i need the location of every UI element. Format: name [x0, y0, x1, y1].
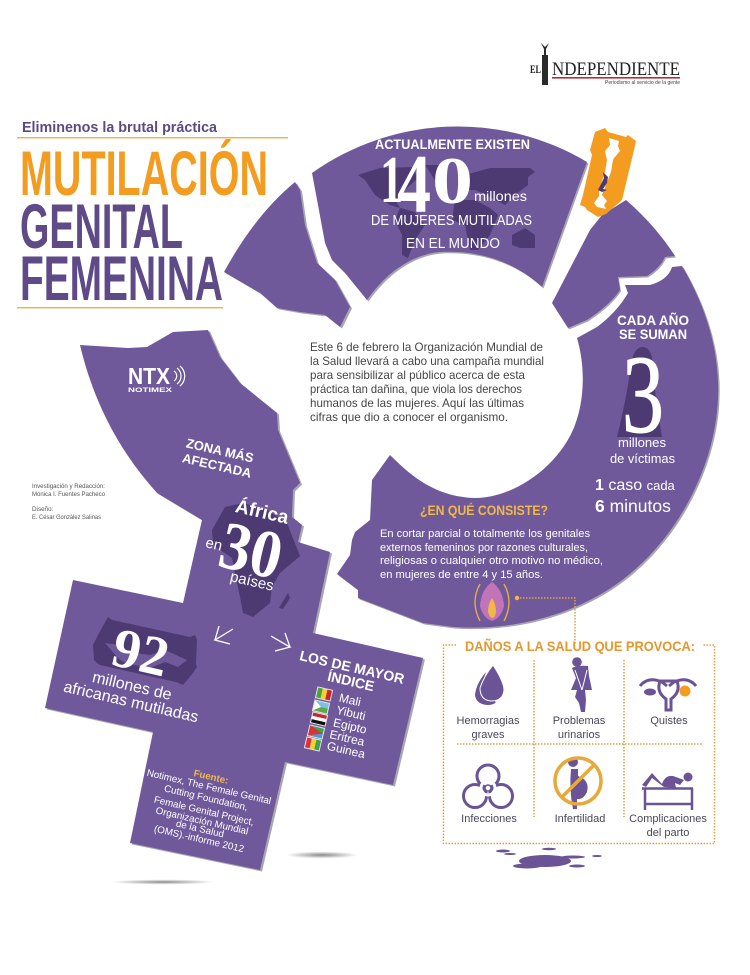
text: los de mayor índice: ÍNDICE [326, 668, 376, 694]
label: problemas urinarios: Problemas [553, 715, 606, 727]
text: cada año se suman [617, 311, 689, 342]
text: millones de víctimas: de víctimas [610, 451, 675, 466]
icon: anatomy [475, 582, 509, 621]
map: Africa [212, 503, 300, 617]
text: fuente [146, 768, 272, 855]
text: actualmente existen: ACTUALMENTE EXISTEN [375, 136, 530, 152]
heading: en qué consiste: ¿EN QUÉ CONSISTE? [420, 503, 548, 518]
list: countries with flags [304, 686, 368, 761]
logo: El Independiente: NDEPENDIENTE [552, 59, 680, 80]
panel: daños a la salud: urinarios [558, 729, 601, 741]
icon: no pregnancy [555, 757, 601, 809]
label: quistes: Quistes [650, 715, 688, 727]
text: fuente: Cutting Foundation, [163, 784, 249, 813]
text: country names: Yibuti [335, 703, 367, 723]
text: cada año se suman: CADA AÑO [617, 311, 689, 328]
text: fuente: (OMS).-informe 2012 [153, 824, 245, 855]
logo: El Independiente: Periodismo al servicio de la gente [605, 80, 680, 86]
text: credits: Diseño: [32, 506, 54, 513]
label: infecciones: Infecciones [461, 813, 517, 825]
text: country names: Mali [338, 691, 362, 709]
flag: Mali [315, 686, 333, 702]
text: credits: Mónica I. Fuentes Pacheco [32, 491, 105, 498]
text: millones: millones [474, 188, 527, 204]
text: country names: Guinea [326, 739, 367, 761]
panel: cross with Africa data [45, 330, 425, 872]
world map [358, 165, 535, 258]
label: infertilidad: Infertilidad [555, 813, 605, 825]
text: fuente: de la Salud [175, 819, 225, 840]
number: 30: 30 [212, 506, 290, 594]
text: zona más afectada: AFECTADA [181, 450, 254, 481]
text: credits: Investigación y Redacción: [32, 483, 105, 490]
text: 1 caso cada 6 minutos: 6 minutos [595, 496, 671, 516]
title [20, 139, 268, 314]
text: credits [32, 483, 105, 521]
text: fuente: Fuente: [192, 768, 229, 787]
panel: intro text: cifras que dio a conocer el organismo. [310, 410, 508, 424]
title: MUTILACIÓN [20, 139, 268, 209]
logo: El Independiente [530, 43, 680, 86]
panel: intro text: humanos de las mujeres. Aquí las últimas [310, 396, 524, 410]
logo: Notimex [128, 363, 185, 394]
logo: El Independiente: EL [530, 62, 541, 76]
arrow: to 92 millones [215, 626, 233, 644]
icon: purple stain [496, 848, 602, 868]
arrow: to mayor índice [271, 633, 290, 651]
title: GENITAL [20, 192, 183, 262]
icon: uterus [640, 680, 696, 710]
text: definición: En cortar parcial o totalmente los genitales [380, 528, 591, 540]
panel: daños a la salud: del parto [647, 827, 689, 839]
flag: Eritrea [307, 724, 325, 740]
icon: childbirth bed [642, 772, 693, 810]
panel: intro text: para sensibilizar al público acerca de esta [310, 368, 525, 382]
title: FEMENINA [20, 244, 223, 314]
flag: Yibuti [312, 699, 330, 715]
shadows under shapes [111, 852, 358, 884]
text: country names [326, 691, 368, 761]
label: hemorragias: Hemorragias [457, 715, 520, 727]
flag: Guinea [304, 736, 322, 752]
logo: Notimex: NTX [128, 363, 171, 389]
text: fuente: Organización Mundial [154, 805, 249, 838]
text: en el mundo: EN EL MUNDO [406, 236, 500, 252]
number: 140 [380, 138, 473, 231]
text: country names: Egipto [332, 715, 368, 737]
number: 140: 1 [380, 143, 403, 217]
text: 1 caso cada 6 minutos [595, 477, 676, 516]
logo: Notimex: NOTIMEX [128, 388, 172, 394]
heading: daños: DAÑOS A LA SALUD QUE PROVOCA: [465, 637, 695, 654]
panel: daños a la salud: graves [471, 729, 505, 741]
text: países: países [228, 568, 275, 595]
text: country names: Eritrea [328, 727, 366, 749]
connector: dotted line from icon to box [515, 596, 575, 645]
heading: subtitle: Eliminenos la brutal práctica [22, 119, 218, 136]
panel: cada año [337, 266, 720, 629]
panel: intro text: práctica tan dañina, que viola los derechos [310, 382, 522, 396]
panel: world total [312, 126, 588, 302]
panel: intro text: la Salud llevará a cabo una campaña mundial [310, 354, 544, 368]
text: definición [380, 528, 603, 581]
text: 1 caso cada 6 minutos: 1 caso cada [595, 477, 676, 494]
text: fuente: Notimex, The Female Genital [146, 768, 272, 807]
number: 92: 92 [106, 616, 175, 689]
icon: biohazard [464, 765, 512, 808]
panel: intro text [310, 340, 544, 424]
text: credits: E. César González Salinas [32, 514, 101, 521]
text: definición: en mujeres de entre 4 y 15 años. [380, 569, 543, 581]
icon: woman holding [571, 657, 592, 712]
text: definición: externos femeninos por razones culturales, [380, 542, 588, 554]
text: de mujeres mutiladas: DE MUJERES MUTILADAS [371, 213, 532, 229]
label: complicaciones: Complicaciones [629, 813, 707, 825]
text: fuente: Female Genital Project, [153, 795, 255, 828]
panel: daños a la salud [444, 637, 714, 844]
text: millones de víctimas [610, 435, 675, 466]
flag: Egipto [310, 711, 328, 727]
icon: orange razor blade [580, 128, 636, 217]
icon: dark blade [93, 617, 197, 685]
number: 3: 3 [622, 334, 664, 457]
text: zona más afectada [181, 435, 255, 481]
text: los de mayor índice: LOS DE MAYOR [298, 647, 406, 687]
text: África: África [233, 495, 291, 529]
panel: right upper fragment [552, 200, 676, 330]
text: cada año se suman: SE SUMAN [619, 326, 687, 342]
number: 140: 4 [397, 138, 431, 231]
text: definición: religiosas o cualquier otro motivo no médico, [380, 555, 603, 567]
number: 140: 0 [432, 144, 473, 218]
text: millones de africanas mutiladas: africanas mutiladas [62, 679, 200, 726]
panel: intro text: Este 6 de febrero la Organización Mundial de [310, 340, 543, 354]
text: en: en [204, 534, 224, 555]
text: millones de africanas mutiladas: millones de [91, 669, 173, 704]
panel: left upper fragment [224, 182, 352, 328]
text: zona más afectada: ZONA MÁS [185, 435, 255, 466]
icon: veiled woman silhouette [617, 347, 662, 437]
icon: drop [475, 665, 504, 705]
text: millones de víctimas: millones [618, 435, 666, 450]
